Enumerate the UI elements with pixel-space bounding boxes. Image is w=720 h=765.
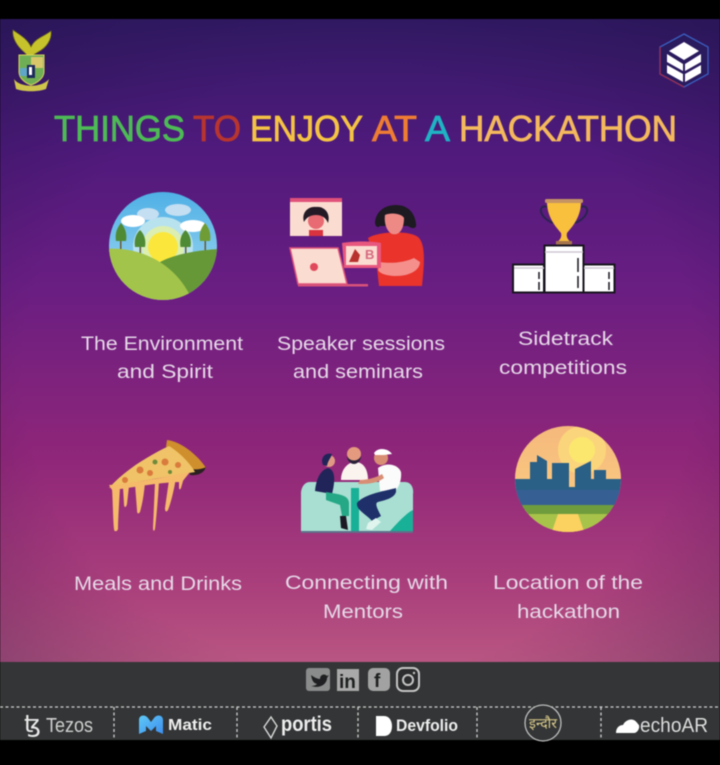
icon: speaker on video call: B bbox=[365, 247, 374, 262]
icon: city skyline at sunset bbox=[515, 426, 621, 534]
sponsor: echoAR: echoAR bbox=[640, 715, 708, 737]
sponsor: Tezos: Tezos bbox=[46, 715, 93, 737]
social icons bbox=[306, 668, 419, 693]
social icons: in bbox=[339, 672, 356, 693]
icon: pizza slice with melting cheese bbox=[109, 440, 206, 531]
icon: hexagonal cube logo bbox=[660, 34, 708, 87]
caption: environment and spirit: and Spirit bbox=[117, 361, 214, 383]
icon: trophy on podium bbox=[513, 199, 614, 292]
sponsor: Matic bbox=[139, 716, 212, 734]
sponsor: Indore seal: इन्दौर bbox=[529, 715, 557, 731]
caption: sidetrack competitions: competitions bbox=[499, 357, 627, 379]
sponsor: Matic: Matic bbox=[168, 717, 212, 734]
sponsor: Devfolio: Devfolio bbox=[396, 716, 458, 735]
title bbox=[54, 108, 677, 149]
caption: speaker sessions bbox=[277, 333, 445, 383]
panel: footer bar bbox=[0, 662, 720, 740]
sponsor: Tezos bbox=[24, 711, 93, 738]
icon: mentors at a table bbox=[301, 447, 413, 533]
dashed sponsor dividers bbox=[0, 707, 720, 740]
caption: speaker sessions: Speaker sessions bbox=[277, 333, 445, 355]
caption: sidetrack competitions: Sidetrack bbox=[518, 328, 613, 350]
title: AT bbox=[372, 108, 417, 149]
sponsor: Devfolio bbox=[376, 716, 458, 736]
caption: speaker sessions: and seminars bbox=[293, 361, 423, 383]
title: HACKATHON bbox=[459, 108, 677, 149]
title: THINGS bbox=[54, 108, 185, 149]
caption: connecting with mentors bbox=[285, 572, 448, 623]
sponsor: Tezos: ꜩ bbox=[24, 711, 41, 738]
caption: sidetrack competitions bbox=[499, 328, 627, 379]
sponsor: portis bbox=[264, 713, 332, 738]
caption: connecting with mentors: Connecting with bbox=[285, 572, 448, 594]
title: ENJOY bbox=[250, 108, 363, 149]
sponsor: Indore seal bbox=[525, 705, 561, 741]
caption: location of the hackathon bbox=[493, 572, 643, 623]
caption: environment and spirit bbox=[81, 333, 244, 383]
title: TO bbox=[193, 108, 241, 149]
caption: meals and drinks: Meals and Drinks bbox=[74, 573, 242, 595]
caption: connecting with mentors: Mentors bbox=[323, 601, 403, 623]
caption: location of the hackathon: hackathon bbox=[517, 601, 620, 623]
social icons: f bbox=[374, 671, 381, 692]
caption: location of the hackathon: Location of the bbox=[493, 572, 643, 594]
sponsor: portis: portis bbox=[281, 713, 332, 736]
caption: environment and spirit: The Environment bbox=[81, 333, 244, 355]
title: A bbox=[425, 108, 450, 149]
icon: speaker on video call bbox=[290, 198, 424, 286]
icon: college crest logo bbox=[13, 30, 51, 91]
icon: landscape with sun bbox=[105, 192, 220, 305]
